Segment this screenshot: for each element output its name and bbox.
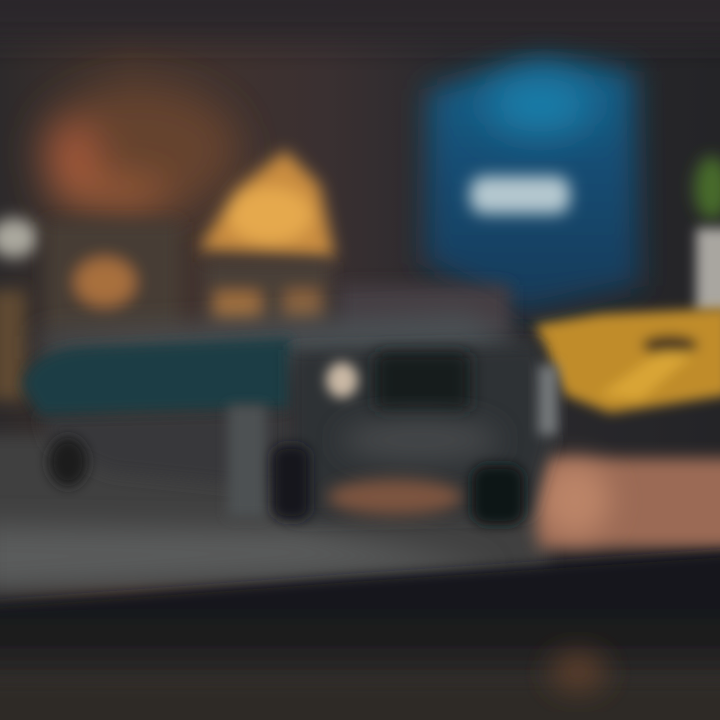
- dark foreground ledge: [0, 552, 720, 720]
- car side teal: [22, 338, 295, 415]
- white vase: [696, 228, 720, 313]
- lower side: [40, 410, 290, 490]
- bumper glow: [327, 479, 463, 515]
- ground: [0, 435, 720, 590]
- right edge of car: [538, 365, 558, 435]
- wheel right: [472, 465, 524, 525]
- left white blur: [0, 218, 38, 258]
- yellow house shape: [198, 150, 335, 258]
- headlight: [326, 362, 358, 398]
- green plant: [694, 156, 720, 220]
- furniture behind the car: [0, 222, 510, 400]
- wheel centre: [272, 445, 310, 520]
- front pillar: [228, 405, 266, 517]
- yellow sign on right: [535, 308, 720, 413]
- car: [22, 312, 558, 525]
- white blurred label on panel: [470, 176, 570, 214]
- warm floor on right: [538, 458, 720, 548]
- orange glow on wall: [40, 85, 240, 215]
- wheel left: [48, 437, 88, 487]
- reflection: [550, 652, 606, 692]
- hood highlight: [340, 418, 500, 462]
- car front: [290, 345, 552, 520]
- car roof / windshield: [40, 312, 535, 372]
- blue panel: [425, 58, 640, 312]
